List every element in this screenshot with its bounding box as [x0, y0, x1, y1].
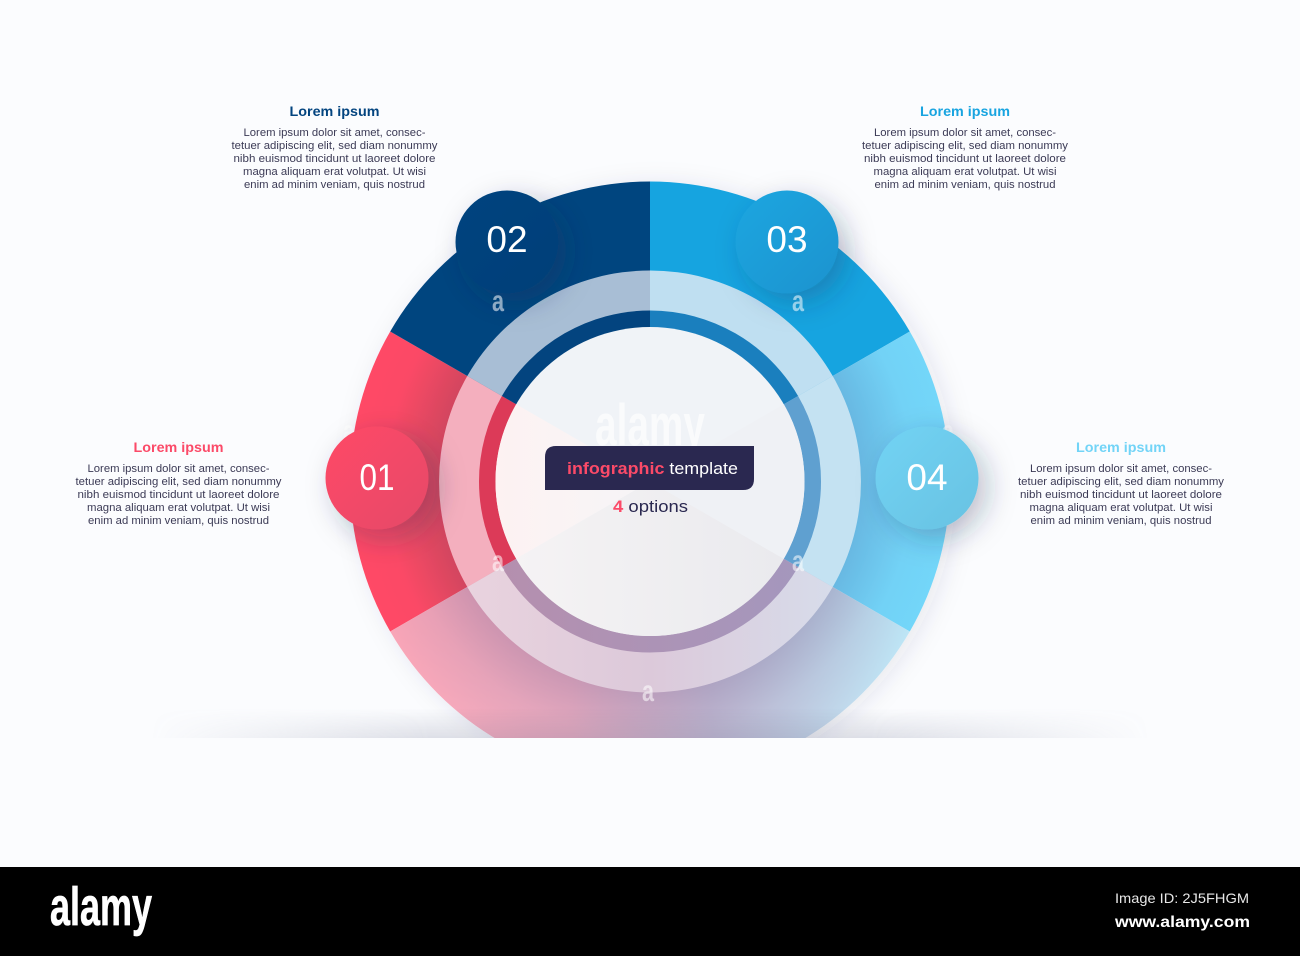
dark inner ring [479, 310, 821, 653]
ground shadow [226, 716, 1074, 738]
text block 02: Lorem ipsum dolor sit amet, consec- [244, 127, 426, 139]
bottom segment inner shade [413, 587, 886, 738]
badge number 04: 04 [906, 457, 948, 498]
badge circle 03 [736, 190, 838, 294]
text block 01 [76, 439, 282, 527]
inner ring 03 [650, 310, 798, 404]
badge 02 [456, 190, 558, 294]
badge circle 01 [326, 426, 428, 530]
inner ring 01 [479, 396, 516, 567]
center watermark: alamy [595, 393, 705, 458]
footer background [0, 867, 1300, 956]
footer logo: alamy [50, 877, 152, 937]
middle ring bottom [468, 567, 832, 692]
inner ring bottom [502, 559, 798, 652]
text block 02: enim ad minim veniam, quis nostrud [244, 179, 425, 191]
bottom faded segment [390, 587, 914, 738]
text block 04 [1018, 439, 1225, 527]
text block 04: enim ad minim veniam, quis nostrud [1030, 515, 1212, 527]
text block 02: nibh euismod tincidunt ut laoreet dolore [234, 153, 436, 165]
heading 02: Lorem ipsum [290, 103, 380, 119]
pill background [545, 446, 754, 490]
text block 04: nibh euismod tincidunt ut laoreet dolore [1020, 489, 1222, 501]
inner ring 02 [502, 310, 650, 404]
outer ring segments [350, 182, 950, 781]
text block 03: tetuer adipiscing elit, sed diam nonummy [862, 140, 1069, 152]
disc bottom wedge [516, 536, 784, 636]
text block 01: Lorem ipsum dolor sit amet, consec- [88, 463, 270, 475]
watermark letters behind badges: a [343, 415, 355, 448]
middle ring 01 [439, 376, 516, 587]
circular diagram [350, 182, 950, 781]
badge circle 04 [876, 426, 978, 530]
watermark letters: a [492, 285, 504, 318]
disc right wedge [784, 404, 805, 558]
middle ring 04 [798, 376, 861, 587]
text block 03: nibh euismod tincidunt ut laoreet dolore [864, 153, 1066, 165]
text block 03: enim ad minim veniam, quis nostrud [874, 179, 1056, 191]
text block 03 [862, 103, 1069, 191]
subtitle: 4 options: 4 options [613, 497, 688, 516]
text block 03: Lorem ipsum dolor sit amet, consec- [874, 127, 1056, 139]
badge 04 [876, 426, 978, 530]
segment 02 outer [390, 180, 650, 403]
segment 04 outer [798, 332, 957, 632]
text block 02 [232, 103, 438, 191]
text block 03: magna aliquam erat volutpat. Ut wisi [874, 166, 1056, 178]
middle ring 03 [650, 270, 833, 404]
text block 04: tetuer adipiscing elit, sed diam nonummy [1018, 476, 1225, 488]
middle ring 02 [467, 270, 650, 404]
center disc [495, 327, 805, 636]
badge circle 02 [456, 190, 558, 294]
text block 02: magna aliquam erat volutpat. Ut wisi [243, 166, 426, 178]
disc left wedge [495, 404, 604, 558]
text block 01: nibh euismod tincidunt ut laoreet dolore [78, 489, 280, 501]
text block 04: magna aliquam erat volutpat. Ut wisi [1030, 502, 1212, 514]
heading 03: Lorem ipsum [920, 103, 1010, 119]
center title pill [545, 446, 754, 490]
segment 01 outer [353, 332, 502, 632]
watermark letters: a [642, 675, 654, 708]
watermark letters behind badges: a [942, 415, 954, 448]
heading 04: Lorem ipsum [1076, 439, 1166, 455]
heading 01: Lorem ipsum [134, 439, 224, 455]
image id: Image ID: 2J5FHGM [1115, 890, 1249, 906]
text block 01: tetuer adipiscing elit, sed diam nonummy [76, 476, 282, 488]
watermark letters: a [792, 285, 804, 318]
disc base [496, 327, 804, 636]
text block 01: enim ad minim veniam, quis nostrud [88, 515, 269, 527]
watermark letters behind badges [343, 415, 954, 448]
website: www.alamy.com [1114, 914, 1250, 931]
inner ring 04 [784, 396, 821, 567]
pill text: infographic template [567, 459, 738, 478]
badge number 02: 02 [486, 219, 528, 260]
badge number 03: 03 [766, 219, 808, 260]
watermark letters: a [492, 545, 504, 578]
text block 04: Lorem ipsum dolor sit amet, consec- [1030, 463, 1212, 475]
translucent middle ring [439, 270, 861, 692]
text block 01: magna aliquam erat volutpat. Ut wisi [87, 502, 270, 514]
watermark letters [492, 285, 804, 708]
watermark letters: a [792, 545, 804, 578]
footer bar [0, 867, 1300, 956]
text block 02: tetuer adipiscing elit, sed diam nonummy [232, 140, 438, 152]
badge 03 [736, 190, 838, 294]
badge 01 [326, 426, 428, 530]
segment 03 outer [650, 180, 914, 396]
badge number 01: 01 [360, 457, 394, 498]
